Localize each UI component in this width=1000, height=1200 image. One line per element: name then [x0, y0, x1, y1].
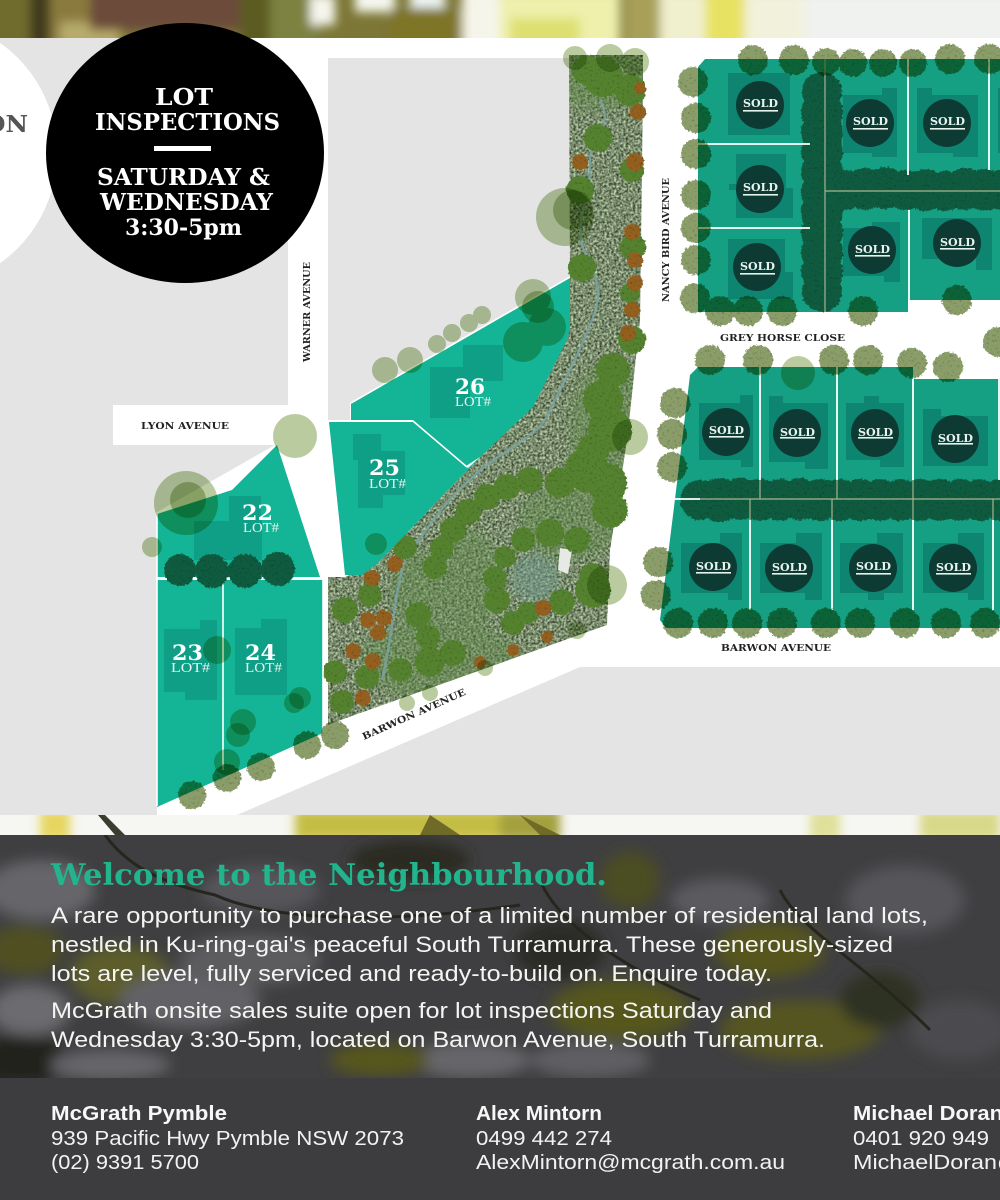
meadow wash — [360, 50, 650, 700]
sold badge — [846, 99, 894, 147]
lot 25 parcel — [329, 422, 480, 575]
hedge across lots 22 to 24 — [164, 552, 295, 588]
parcels north — [698, 59, 1000, 312]
lot boundary lines — [157, 277, 570, 806]
houses north — [728, 73, 1000, 299]
contact: Michael Doran: 0401 920 949 — [853, 1128, 989, 1150]
sold badge: SOLD — [696, 560, 731, 573]
road label: Barwon Avenue angled: BARWON AVENUE — [361, 687, 468, 743]
lot 24 label: 24 — [245, 640, 276, 665]
callout: lot inspections badge: 3:30-5pm — [125, 215, 242, 241]
parcels south — [660, 367, 1000, 628]
lot 23 label: 23 — [172, 640, 203, 665]
sold badge — [736, 81, 784, 129]
road label: Grey Horse Close: GREY HORSE CLOSE — [720, 333, 845, 344]
sales suite paragraph — [51, 998, 825, 1052]
intro paragraph: A rare opportunity to purchase one of a limited number of residential land lots, — [51, 903, 928, 928]
road label: Nancy Bird Avenue: NANCY BIRD AVENUE — [661, 178, 672, 302]
callout: lot inspections badge: INSPECTIONS — [95, 109, 280, 136]
white roundabout circle with cut-off label — [0, 18, 57, 288]
overlapping canopy shading — [170, 190, 593, 747]
contact: McGrath Pymble: McGrath Pymble — [51, 1103, 227, 1125]
road label: Barwon Avenue east: BARWON AVENUE — [721, 643, 831, 654]
contact: Alex Mintorn: 0499 442 274 — [476, 1128, 612, 1150]
lot 22 label: 22 — [242, 500, 273, 525]
contact: Alex Mintorn: AlexMintorn@mcgrath.com.au — [476, 1152, 785, 1174]
sold lots block: south of Grey Horse Close — [660, 367, 1000, 628]
lot 22 label: LOT# — [243, 520, 279, 535]
contact: McGrath Pymble — [51, 1103, 404, 1174]
contact: Alex Mintorn — [476, 1103, 785, 1174]
sold badge: SOLD — [938, 432, 973, 445]
contact: Michael Doran — [853, 1103, 1000, 1174]
sold badge: SOLD — [709, 424, 744, 437]
sold badge — [931, 415, 979, 463]
sold badge — [702, 408, 750, 456]
lot 25 label — [369, 455, 406, 491]
map base: white road reserve — [0, 38, 1000, 815]
lot 22 label — [242, 500, 279, 535]
lot 26 label: 26 — [455, 374, 485, 399]
sold badge — [733, 243, 781, 291]
sold badge — [929, 544, 977, 592]
sold badge — [736, 165, 784, 213]
sold badge: SOLD — [743, 97, 778, 110]
sold badge — [848, 226, 896, 274]
sold badge: SOLD — [743, 181, 778, 194]
lot 22 parcel — [157, 445, 320, 577]
lot 26 label: LOT# — [455, 394, 491, 409]
callout: lot inspections badge: LOT — [155, 84, 213, 111]
sold badge — [923, 99, 971, 147]
background photo strip: lower — [0, 815, 1000, 835]
heading: Welcome to the Neighbourhood. — [50, 858, 607, 893]
lot 23 label — [171, 640, 210, 675]
sold badge — [849, 544, 897, 592]
green park trees — [323, 55, 646, 714]
lot house footprints — [164, 345, 503, 700]
intro paragraph: nestled in Ku-ring-gai's peaceful South Turramurra. These generously-sized — [51, 932, 893, 957]
lot 24 label: LOT# — [245, 660, 282, 675]
lots 23 and 24 parcels — [157, 580, 323, 807]
lot 26 label — [455, 374, 491, 409]
houses south — [681, 395, 988, 600]
lot lines north — [698, 59, 1000, 312]
sales suite paragraph: Wednesday 3:30-5pm, located on Barwon Avenue, South Turramurra. — [51, 1027, 825, 1052]
street trees — [178, 44, 1000, 809]
road label: Lyon Avenue: LYON AVENUE — [141, 421, 229, 432]
sold badge: SOLD — [858, 426, 893, 439]
sold badge — [773, 409, 821, 457]
panel: contact footer — [0, 1078, 1000, 1200]
lot lines south — [675, 367, 1000, 610]
panel: park reserve with creek — [323, 50, 650, 725]
sold badge: SOLD — [856, 560, 891, 573]
lot 24 label — [245, 640, 282, 675]
lot 25 label: 25 — [369, 455, 400, 480]
sold badge: SOLD — [740, 260, 775, 273]
sold badge: SOLD — [940, 236, 975, 249]
sold badge: SOLD — [780, 426, 815, 439]
hedges north — [801, 72, 1000, 312]
sold badge — [765, 544, 813, 592]
sold badge — [689, 543, 737, 591]
brown park trees — [345, 82, 646, 706]
darkened photo — [0, 835, 1000, 1085]
creek — [382, 100, 605, 680]
sold badge — [851, 409, 899, 457]
callout: lot inspections badge: WEDNESDAY — [99, 189, 274, 216]
hedge south — [680, 478, 1000, 522]
sold lots block: north of Grey Horse Close — [698, 59, 1000, 312]
sold badge: SOLD — [936, 561, 971, 574]
sold badge — [933, 219, 981, 267]
lot 26 parcel — [351, 277, 570, 466]
intro paragraph: lots are level, fully serviced and ready-to-build on. Enquire today. — [51, 961, 772, 986]
sales suite paragraph: McGrath onsite sales suite open for lot inspections Saturday and — [51, 998, 772, 1023]
road label: Warner Avenue: WARNER AVENUE — [302, 262, 313, 363]
contact: Alex Mintorn: Alex Mintorn — [476, 1103, 602, 1125]
panel: welcome text over darkened photo — [0, 835, 1000, 1085]
sold badge: SOLD — [855, 243, 890, 256]
pond — [511, 548, 572, 602]
contact: Michael Doran: Michael Doran — [853, 1103, 1000, 1125]
translucent tree canopies — [142, 44, 815, 775]
grey neighbouring land blocks — [0, 38, 1000, 815]
sold badge: SOLD — [930, 115, 965, 128]
contact: McGrath Pymble: 939 Pacific Hwy Pymble NSW 2073 — [51, 1128, 404, 1150]
intro paragraph — [51, 903, 928, 986]
background photo strip: top — [0, 0, 1000, 38]
lot 23 label: LOT# — [171, 660, 210, 675]
callout: lot inspections badge: SATURDAY & — [97, 164, 270, 191]
sold badge: SOLD — [772, 561, 807, 574]
sold badge: SOLD — [853, 115, 888, 128]
park ground texture — [328, 55, 643, 725]
lot 25 label: LOT# — [369, 476, 406, 491]
contact: McGrath Pymble: (02) 9391 5700 — [51, 1152, 199, 1174]
callout: lot inspections badge — [46, 23, 324, 283]
